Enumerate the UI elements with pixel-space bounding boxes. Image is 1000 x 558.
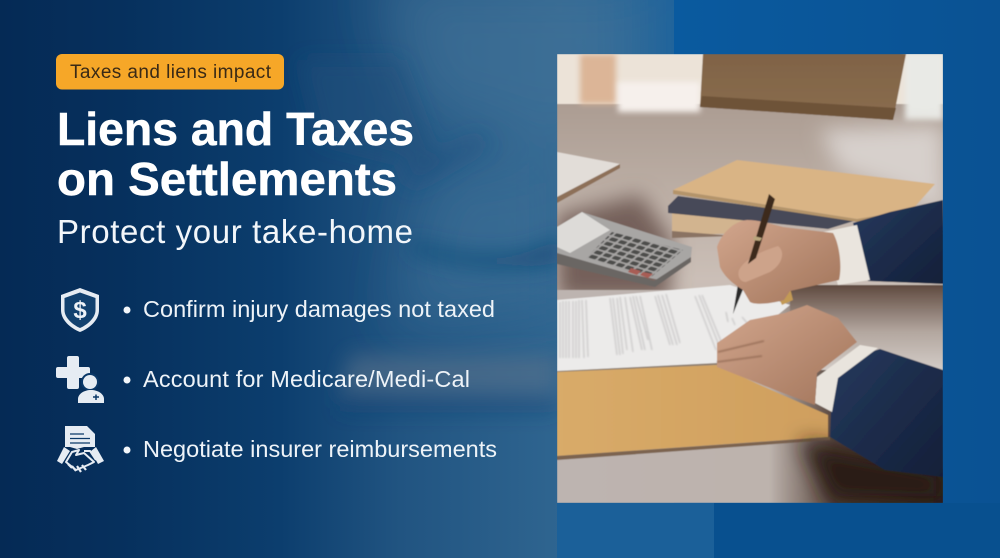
item: injury damages: Confirm injury damages not taxed: [143, 296, 495, 322]
tag: Taxes and liens impact: [70, 62, 272, 83]
stack of folders: [668, 160, 935, 238]
document page: [557, 285, 790, 374]
subtitle: Protect your take-home: [57, 213, 413, 250]
tablet on desk: [557, 152, 620, 203]
tan envelope: [557, 288, 830, 460]
title: [57, 103, 414, 205]
icon: shield with dollar sign: [61, 288, 99, 332]
item: Medicare: Account for Medicare/Medi-Cal: [143, 366, 470, 392]
item: insurer reimbursements: Negotiate insurer reimbursements: [143, 436, 497, 462]
shadow on desk: [800, 440, 943, 503]
photo: signing a document at a desk: [557, 54, 943, 503]
item: injury damages: [61, 288, 495, 332]
tag: [56, 54, 284, 90]
chair: [700, 54, 906, 120]
title: Liens and Taxes: [57, 103, 414, 155]
icon: medical cross and person: [56, 356, 104, 403]
desk and blurred background: [557, 54, 943, 503]
icon: document and handshake: [57, 426, 104, 472]
resting hand: [717, 305, 857, 405]
upper suit sleeve and cuff: [823, 200, 943, 285]
item: Medicare: [56, 356, 470, 403]
icon: shield with dollar sign: $: [73, 297, 87, 324]
item: insurer reimbursements: [57, 426, 497, 472]
title: on Settlements: [57, 153, 397, 205]
calculator: [557, 212, 692, 287]
writing hand with pen: [717, 194, 840, 314]
lower suit sleeve and cuff: [815, 345, 943, 477]
